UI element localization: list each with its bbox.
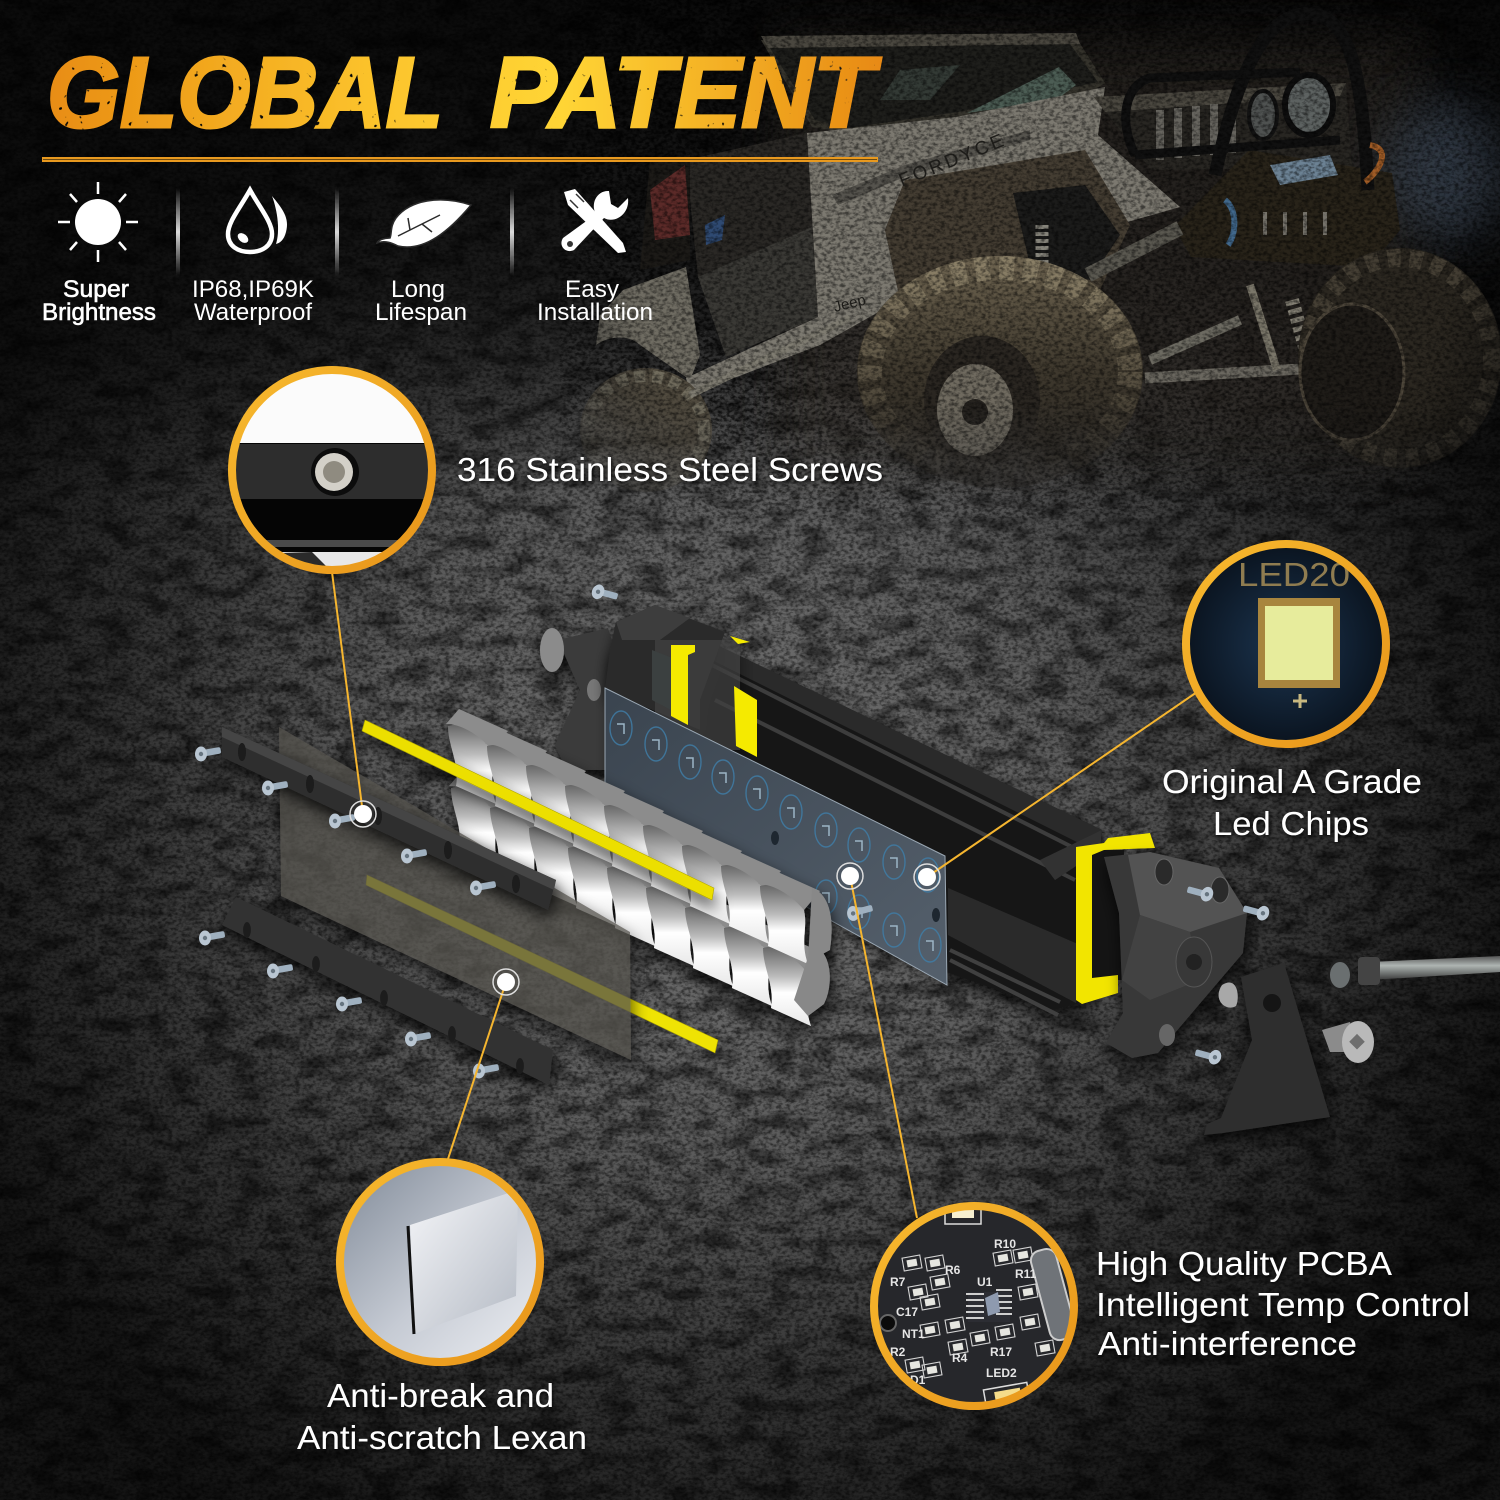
- callout: lexan: Anti-scratch Lexan: [297, 1420, 587, 1457]
- callout: lexan: Anti-break and: [327, 1378, 554, 1415]
- feature: waterproof: Waterproof: [194, 299, 312, 326]
- callout: LED chips: LED20: [1238, 556, 1350, 593]
- callout: PCBA: High Quality PCBA: [1096, 1246, 1393, 1283]
- screws: [195, 582, 874, 1078]
- callout: LED chips: [1162, 542, 1422, 843]
- callout markers: [350, 801, 940, 995]
- feature: super brightness: [42, 182, 156, 326]
- icon: water drops: [228, 190, 287, 252]
- callout: lexan: [297, 1160, 587, 1457]
- exploded LED light bar: [195, 582, 1500, 1135]
- icon: tools: [561, 189, 628, 253]
- icon: leaf: [377, 200, 471, 247]
- top rail: [222, 727, 556, 910]
- callout: PCBA: D1: [910, 1373, 926, 1387]
- lower rail: [222, 897, 553, 1085]
- callout: screws: 316 Stainless Steel Screws: [457, 452, 883, 489]
- feature: waterproof: IP68,IP69K: [192, 276, 314, 303]
- callout: PCBA: NT1: [902, 1327, 925, 1341]
- title: PATENT: [490, 37, 882, 149]
- callout: PCBA: R6: [945, 1263, 961, 1277]
- large bolt: [1322, 1021, 1374, 1063]
- led rings: [610, 711, 941, 962]
- callout: PCBA: R4: [952, 1351, 968, 1365]
- lower yellow strip: [366, 875, 718, 1053]
- left bracket: [540, 628, 615, 823]
- jeep right wheel: [1298, 248, 1500, 468]
- feature: waterproof: [192, 190, 314, 326]
- title: GLOBAL: [47, 37, 443, 149]
- callout: PCBA: R10: [994, 1237, 1016, 1251]
- feature: long lifespan: Lifespan: [375, 299, 467, 326]
- callout: PCBA: C17: [896, 1305, 918, 1319]
- title: [47, 37, 882, 149]
- callout: PCBA: Intelligent Temp Control: [1096, 1287, 1470, 1324]
- right end cap screws: [1185, 879, 1272, 1067]
- yellow gaskets left: [671, 636, 757, 757]
- callout: PCBA: Anti-interference: [1098, 1326, 1357, 1363]
- feature: easy installation: Easy: [565, 276, 619, 303]
- right yellow gasket: [1076, 833, 1155, 1004]
- housing: [610, 632, 1102, 1015]
- reflector: [446, 709, 832, 1026]
- callout: PCBA: LED2: [986, 1366, 1017, 1380]
- feature: super brightness: Brightness: [42, 299, 156, 326]
- feature: easy installation: [537, 189, 653, 326]
- jeep suspension: [1036, 222, 1304, 384]
- jeep front end: [1094, 46, 1400, 260]
- right end cap: [1104, 852, 1247, 1058]
- jeep rear wheel: [580, 368, 712, 492]
- pcb board: [605, 688, 947, 985]
- feature: super brightness: Super: [63, 276, 129, 303]
- callout: PCBA: R7: [890, 1275, 906, 1289]
- feature: long lifespan: [375, 200, 471, 326]
- callout: PCBA: R17: [990, 1345, 1012, 1359]
- title underline: [42, 157, 878, 162]
- callout: screws: [230, 368, 883, 575]
- jeep photo background: FORDYCE: [896, 129, 1009, 192]
- jeep wheel well: [885, 150, 1130, 300]
- callout: PCBA: R11: [1015, 1267, 1037, 1281]
- callout: PCBA: [872, 1204, 1470, 1412]
- callout lines: [332, 572, 1200, 1218]
- cable: [1329, 956, 1500, 989]
- feature: easy installation: Installation: [537, 299, 653, 326]
- callout: LED chips: Led Chips: [1213, 806, 1369, 843]
- jeep windshield: [761, 33, 1105, 133]
- callout: PCBA: R2: [890, 1345, 906, 1359]
- icon: sun: [58, 182, 138, 262]
- jeep photo background: [560, 0, 1500, 520]
- right bracket: [1204, 963, 1330, 1135]
- jeep cabin: [640, 133, 818, 357]
- jeep front wheel: [857, 256, 1143, 488]
- left end cap: [605, 605, 740, 750]
- lexan plate: [279, 727, 631, 1060]
- jeep photo background: Jeep: [832, 292, 868, 316]
- callout: LED chips: Original A Grade: [1162, 764, 1422, 801]
- jeep rear body: [596, 267, 700, 380]
- callout: PCBA: U1: [977, 1275, 993, 1289]
- jeep body: [686, 87, 1180, 395]
- feature: long lifespan: Long: [391, 276, 445, 303]
- top yellow strip: [362, 720, 714, 900]
